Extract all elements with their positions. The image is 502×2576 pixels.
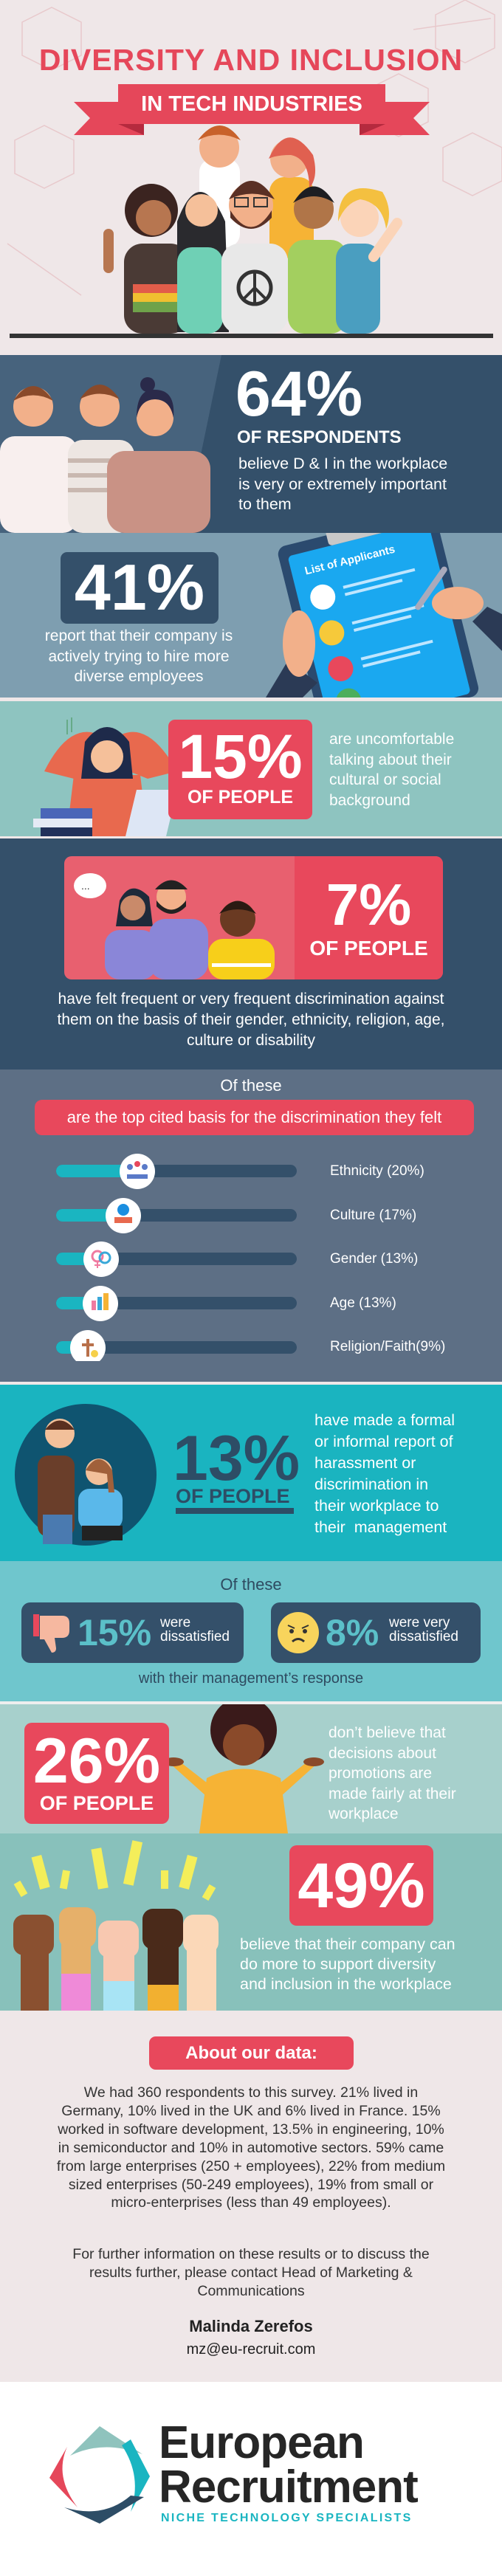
text: survey details: in semiconductor and 10% in automotive sectors. 59% came [58, 2140, 444, 2156]
callout: 15% dissatisfied: were [160, 1615, 190, 1630]
bar: religion: Religion/Faith(9%) [330, 1339, 445, 1354]
text: 64% description: to them [238, 495, 292, 513]
divider [0, 1701, 502, 1704]
text: tagline: NICHE TECHNOLOGY SPECIALISTS [161, 2512, 413, 2524]
text: survey details: micro-enterprises (less than 49 employees). [111, 2194, 391, 2211]
bar chart: discrimination basis: Culture (17%) [330, 1208, 416, 1223]
bar chart: discrimination basis [56, 1154, 424, 1321]
panel: top cited basis [0, 1070, 502, 1382]
text: 64% description [238, 455, 447, 513]
ribbon: subtitle [74, 84, 430, 135]
callout: 15% dissatisfied: 15% [78, 1612, 151, 1653]
stat box: 26% of people: OF PEOPLE [40, 1792, 154, 1814]
text: 7% description [58, 991, 444, 1049]
heading: of these: Of these [220, 1076, 282, 1095]
callout: 15% dissatisfied: dissatisfied [160, 1629, 230, 1645]
panel: 7% discrimination [0, 838, 502, 1070]
text: survey details: We had 360 respondents to this survey. 21% lived in [84, 2084, 418, 2101]
text: 49% description: and inclusion in the workplace [240, 1975, 452, 1993]
panel: 15% uncomfortable [0, 701, 502, 836]
text: 7% description: culture or disability [187, 1032, 315, 1049]
stat box: 7% with illustration: 7% [326, 872, 411, 937]
text: contact name: Malinda Zerefos [189, 2317, 313, 2335]
text: survey details [57, 2084, 445, 2211]
panel: 13% reported [0, 1385, 502, 1561]
text: with management response: with their management’s response [139, 1670, 363, 1687]
callout: 8% very dissatisfied: were very [389, 1615, 450, 1630]
illustration: clipboard list of applicants: List of Applicants [303, 543, 396, 577]
panel: header background [0, 0, 502, 355]
text: survey details: Germany, 10% lived in the UK and 6% lived in France. 15% [61, 2103, 441, 2119]
stat: 13% of people: 13% [173, 1423, 300, 1494]
callout: top cited basis [35, 1100, 474, 1135]
footer: logo [0, 2382, 502, 2576]
text: 64% description: is very or extremely important [238, 475, 447, 493]
callout: 8% very dissatisfied: dissatisfied [389, 1629, 458, 1645]
panel: about our data [0, 2011, 502, 2382]
text: contact info: results further, please contact Head of Marketing & [89, 2265, 413, 2281]
stat: 64%: 64% [235, 359, 362, 430]
stat box: 26% of people [24, 1723, 169, 1824]
text: 41% description [45, 627, 233, 685]
illustration: stressed woman [33, 717, 171, 836]
text: 49% description [240, 1935, 455, 1993]
text: 15% description: are uncomfortable [329, 731, 454, 748]
label: of respondents: OF RESPONDENTS [237, 427, 402, 447]
text: 15% description: background [329, 792, 410, 809]
text: 7% description: them on the basis of their gender, ethnicity, religion, age, [58, 1011, 444, 1028]
heading: of these: Of these [220, 1575, 282, 1594]
stat box: 15% of people [168, 720, 312, 819]
text: survey details: worked in software development, 13.5% in engineering, 10% [58, 2121, 444, 2138]
text: 26% description [329, 1724, 456, 1822]
text: 26% description: promotions are [329, 1765, 432, 1782]
text: 64% description: believe D & I in the workplace [238, 455, 447, 472]
text: 49% description: believe that their company can [240, 1935, 455, 1953]
text: contact info: Communications [197, 2283, 305, 2299]
stat box: 26% of people: 26% [33, 1726, 160, 1797]
text: 41% description: report that their company is [45, 627, 233, 644]
text: contact info [72, 2246, 430, 2299]
callout: 8% very dissatisfied [271, 1602, 481, 1663]
heading pill: about our data: About our data: [185, 2043, 317, 2063]
text: 13% description: harassment or [314, 1454, 416, 1472]
text: survey details: sized enterprises (50-249 employees), 19% from small or [69, 2177, 433, 2193]
text: 15% description [329, 731, 454, 809]
panel: 41% hiring [0, 533, 502, 698]
text: contact info: For further information on these results or to discuss the [72, 2246, 430, 2262]
text: 13% description: their workplace to [314, 1497, 439, 1515]
icon: logo mark [49, 2426, 150, 2524]
text: 49% description: do more to support diversity [240, 1955, 436, 1973]
text: 13% description: discrimination in [314, 1475, 428, 1493]
text: 13% description: have made a formal [314, 1411, 455, 1429]
panel: management response [0, 1561, 502, 1701]
text: European Recruitment: European [159, 2417, 364, 2468]
panel: 64% respondents [0, 355, 502, 533]
divider bar [10, 334, 493, 338]
text: 7% description: have felt frequent or very frequent discrimination against [58, 991, 444, 1008]
illustration: shrugging woman [169, 1704, 324, 1833]
text: 15% description: cultural or social [329, 771, 441, 788]
footer: logo: Recruitment [159, 2462, 418, 2513]
text: email: mz@eu-recruit.com [187, 2341, 315, 2358]
stat box: 7% with illustration [64, 856, 443, 979]
text: 41% description: diverse employees [74, 668, 204, 685]
stat box: 7% with illustration: OF PEOPLE [309, 937, 428, 960]
stat box: 7% with illustration: ... [81, 880, 90, 892]
stat box: 41%: 41% [75, 551, 204, 624]
callout: 8% very dissatisfied: 8% [326, 1612, 379, 1653]
illustration: circle with two people [15, 1404, 157, 1546]
title: DIVERSITY AND INCLUSION [39, 43, 463, 77]
text: 26% description: made fairly at their [329, 1785, 456, 1802]
text: 26% description: decisions about [329, 1745, 436, 1761]
stat box: 15% of people: OF PEOPLE [188, 787, 293, 807]
text: 15% description: talking about their [329, 751, 452, 768]
heading pill: about our data [149, 2036, 354, 2070]
panel: 26% promotions [0, 1704, 502, 1833]
text: 41% description: actively trying to hire more [48, 648, 230, 664]
illustration: raised fists [13, 1840, 219, 2011]
text: survey details: from large enterprises (250 + employees), 22% from medium [57, 2158, 445, 2174]
text: 13% description: or informal report of [314, 1433, 453, 1450]
bar: religion [56, 1330, 445, 1361]
bar chart: discrimination basis: Ethnicity (20%) [330, 1163, 424, 1179]
bar chart: discrimination basis: Gender (13%) [330, 1251, 418, 1267]
ribbon: subtitle: IN TECH INDUSTRIES [141, 92, 362, 116]
text: 26% description: workplace [329, 1805, 399, 1822]
illustration: diverse group of people [103, 125, 402, 334]
callout: 15% dissatisfied [21, 1602, 244, 1663]
panel: 49% more support [0, 1833, 502, 2011]
illustration: clipboard list of applicants [266, 533, 502, 698]
text: 26% description: don’t believe that [329, 1724, 446, 1741]
stat box: 49%: 49% [298, 1850, 425, 1921]
panel: 13% reported: OF PEOPLE [176, 1485, 290, 1507]
bar chart: discrimination basis: Age (13%) [330, 1295, 396, 1311]
text: 13% description [314, 1411, 455, 1536]
callout: top cited basis: are the top cited basis for the discrimination they felt [67, 1108, 441, 1126]
text: 13% description: their management [314, 1518, 447, 1536]
stat box: 15% of people: 15% [178, 722, 303, 791]
